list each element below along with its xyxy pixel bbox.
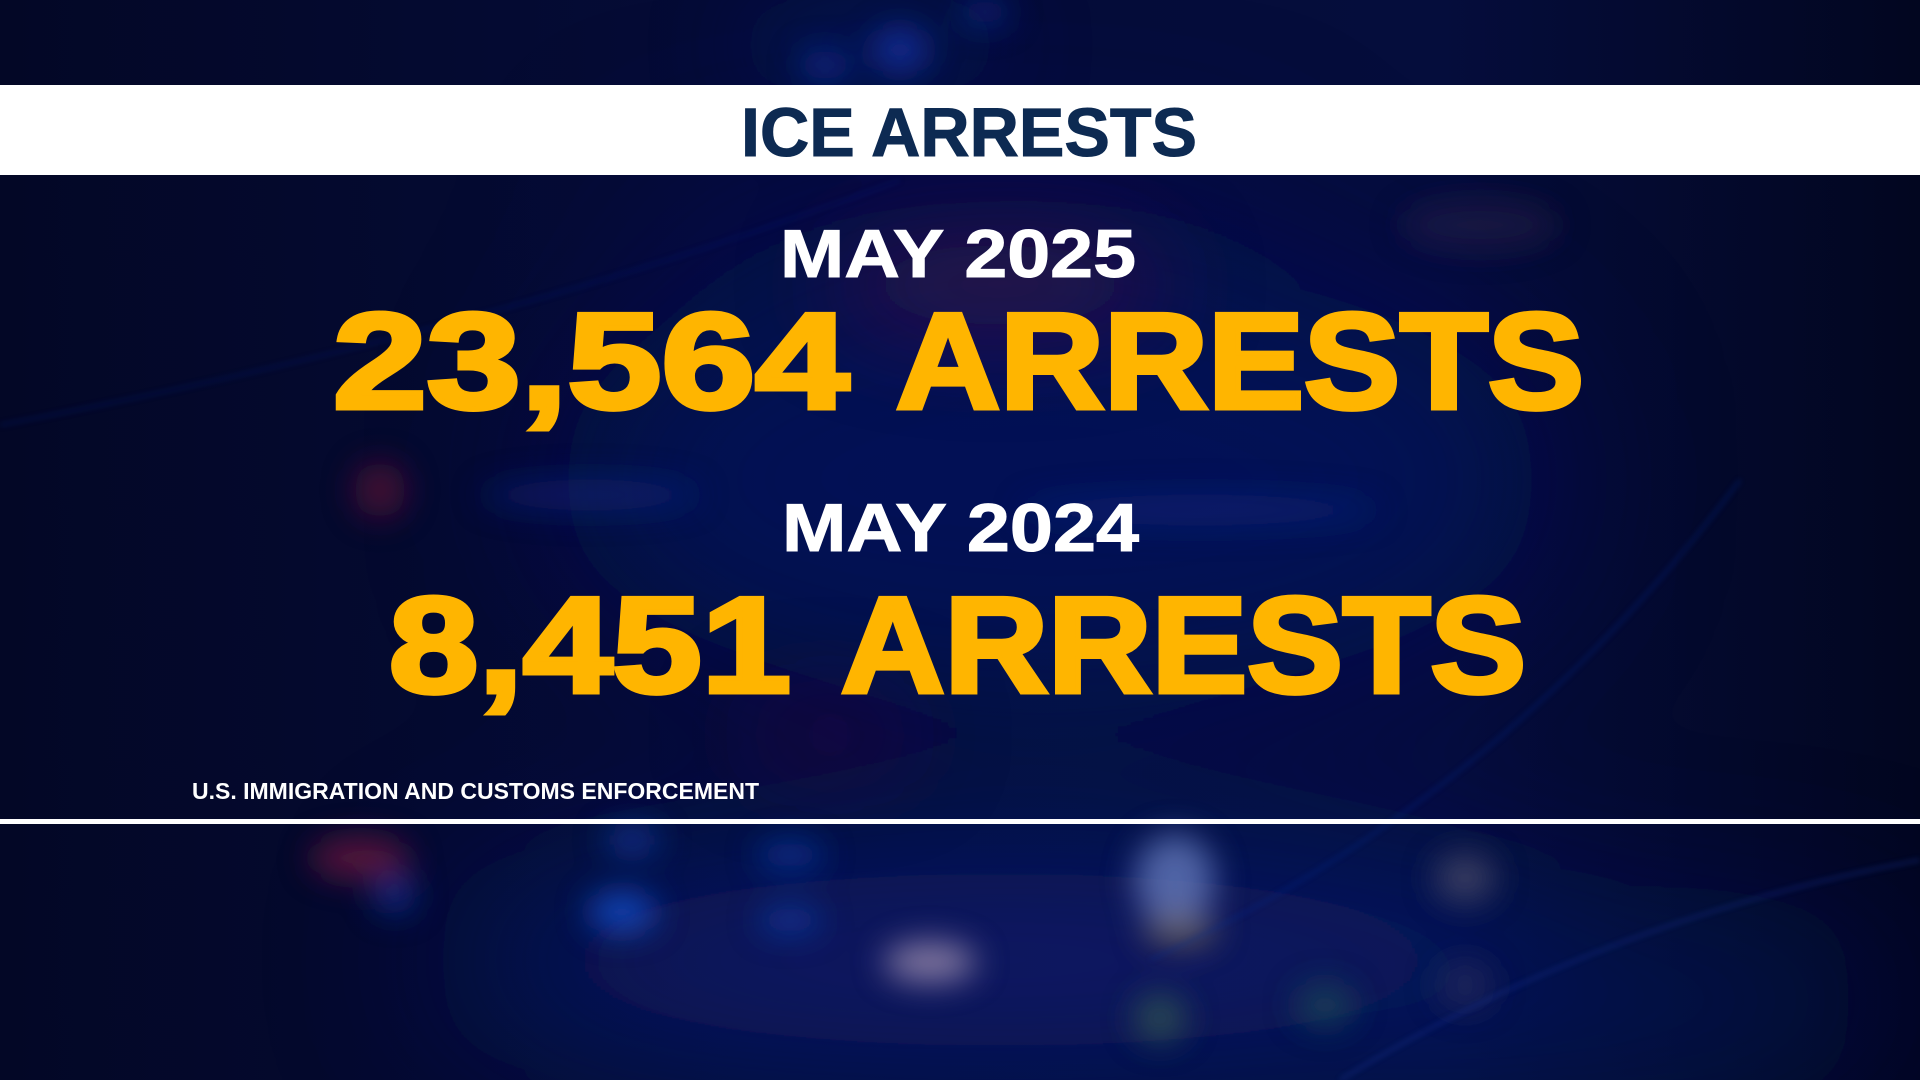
source line: U.S. IMMIGRATION AND CUSTOMS ENFORCEMENT (192, 778, 759, 804)
title banner (0, 85, 1920, 175)
lower divider (0, 819, 1920, 824)
figure: 8,451 arrests (389, 569, 1526, 721)
figure: 23,564 arrests: 23,564 (333, 285, 849, 437)
label: May 2024: MAY 2024 (782, 490, 1139, 566)
figure: 23,564 arrests (333, 285, 1584, 437)
figure: 23,564 arrests: ARRESTS (896, 285, 1584, 437)
figure: 8,451 arrests: 8,451 (389, 569, 791, 721)
figure: 8,451 arrests: ARRESTS (841, 569, 1526, 721)
title: ICE ARRESTS (741, 94, 1197, 171)
label: May 2025: MAY 2025 (780, 216, 1136, 292)
